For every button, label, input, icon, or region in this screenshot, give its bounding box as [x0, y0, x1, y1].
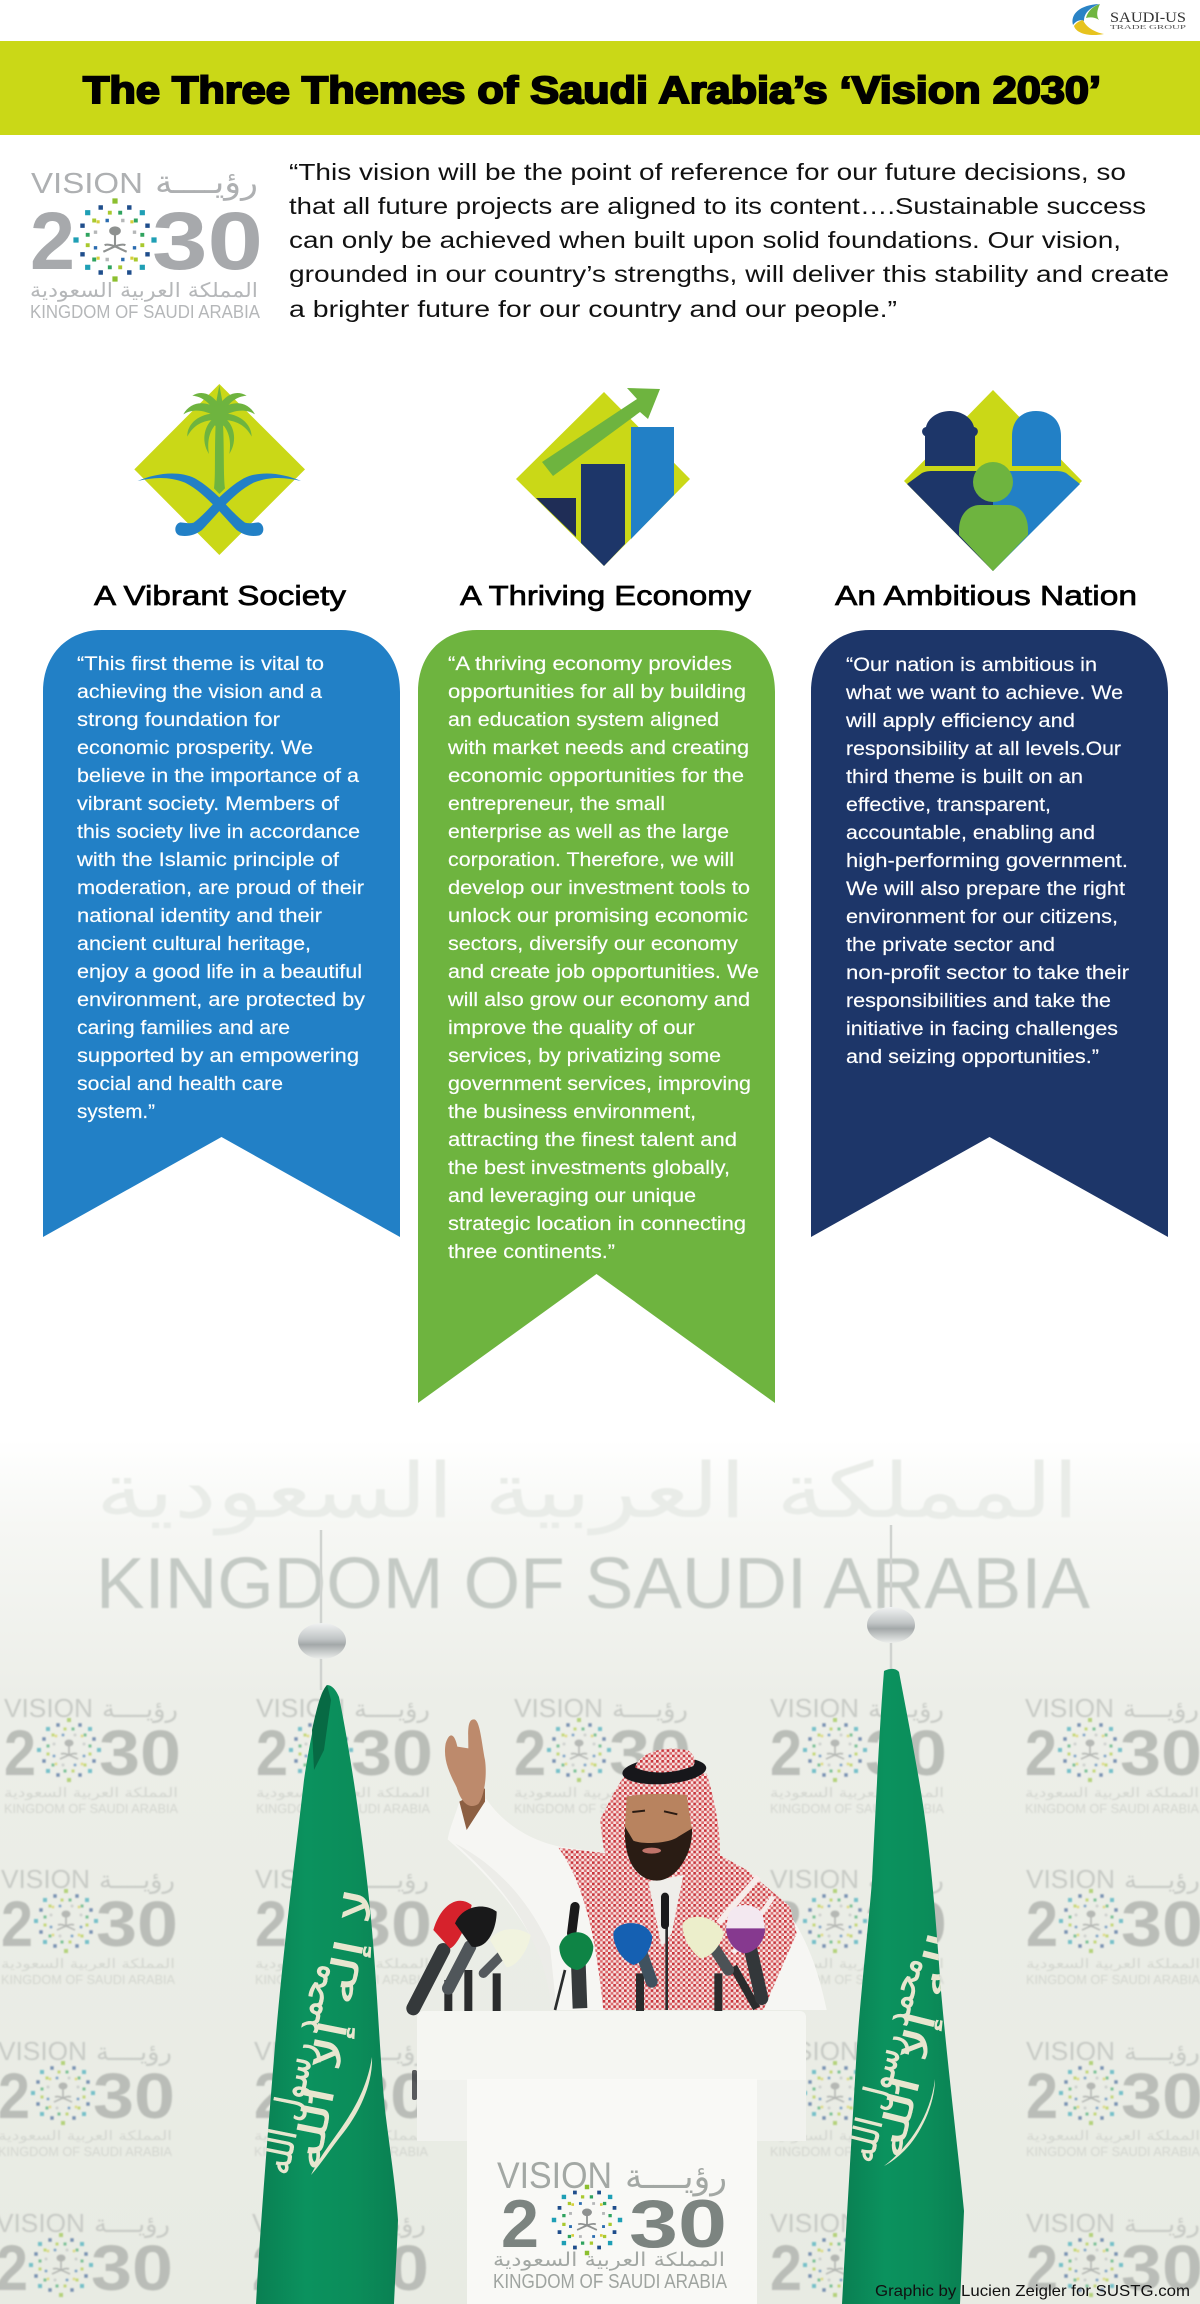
backdrop: repeated Vision 2030 logos: VISION [770, 1864, 859, 1894]
podium [412, 2011, 806, 2304]
backdrop: repeated Vision 2030 logos: المملكة العربية السعودية [4, 1786, 178, 1801]
backdrop: repeated Vision 2030 logos: KINGDOM OF SAUDI ARABIA [1025, 1801, 1199, 1816]
ribbon text: strategic location in connecting [448, 1214, 746, 1235]
backdrop: repeated Vision 2030 logos: 30 [349, 2060, 431, 2132]
backdrop: repeated Vision 2030 logos: رؤيــــة [99, 1866, 175, 1894]
ribbon text: economic prosperity. We [77, 738, 313, 759]
backdrop: repeated Vision 2030 logos: رؤيــــة [868, 1866, 944, 1894]
ribbon text: economic opportunities for the [448, 766, 744, 787]
ribbon text: government services, improving [448, 1074, 751, 1095]
heading: A Thriving Economy: A Thriving Economy [460, 580, 751, 611]
intro quote: a brighter future for our country and our people.” [289, 296, 897, 322]
ribbon text: will also grow our economy and [447, 990, 750, 1011]
backdrop: repeated Vision 2030 logos: 2 [770, 2232, 802, 2304]
backdrop: repeated Vision 2030 logos: رؤيــــة [102, 1695, 178, 1723]
podium Vision 2030 logo: VISION [497, 2155, 612, 2196]
backdrop: repeated Vision 2030 logos: 30 [347, 2232, 429, 2304]
backdrop: repeated Vision 2030 logos: رؤيــــة [1123, 1695, 1199, 1723]
podium Vision 2030 logo [493, 2155, 728, 2293]
backdrop: repeated Vision 2030 logos: 2 [1026, 1888, 1058, 1960]
backdrop: repeated Vision 2030 logos: VISION [1026, 1864, 1115, 1894]
backdrop: repeated Vision 2030 logos: KINGDOM OF SAUDI ARABIA [254, 2144, 428, 2159]
ribbon text: what we want to achieve. We [845, 683, 1123, 704]
backdrop: repeated Vision 2030 logos: 2 [4, 1717, 36, 1789]
ribbon text: national identity and their [77, 906, 323, 927]
backdrop: repeated Vision 2030 logos: 30 [1120, 1717, 1200, 1789]
backdrop: repeated Vision 2030 logos: 2 [514, 1717, 546, 1789]
backdrop: repeated Vision 2030 logos: 30 [1121, 2060, 1200, 2132]
backdrop: repeated Vision 2030 logos: المملكة العربية السعودية [0, 2129, 172, 2144]
backdrop: repeated Vision 2030 logos: KINGDOM OF SAUDI ARABIA [0, 2144, 172, 2159]
right flag with pole: محمد رسول الله [841, 1952, 932, 2166]
ribbon text: entrepreneur, the small [448, 794, 665, 815]
backdrop: repeated Vision 2030 logos: 30 [96, 1888, 178, 1960]
ribbon text: unlock our promising economic [448, 906, 748, 927]
podium Vision 2030 logo: المملكة العربية السعودية [493, 2249, 725, 2271]
ribbon text: responsibilities and take the [846, 991, 1111, 1012]
backdrop: repeated Vision 2030 logos: 2 [770, 2060, 802, 2132]
icon: bar chart with arrow [516, 388, 690, 566]
backdrop: repeated Vision 2030 logos: المملكة العربية السعودية [514, 1786, 688, 1801]
right flag with pole [841, 1525, 976, 2304]
Vision 2030 logo: VISION [31, 168, 143, 200]
heading: An Ambitious Nation: An Ambitious Nation [835, 580, 1137, 611]
backdrop: repeated Vision 2030 logos: المملكة العربية السعودية [256, 1786, 430, 1801]
backdrop: repeated Vision 2030 logos: KINGDOM OF SAUDI ARABIA [1026, 1972, 1200, 1987]
ribbon text: believe in the importance of a [77, 766, 359, 787]
backdrop: repeated Vision 2030 logos: 30 [865, 1717, 947, 1789]
ribbon text: three continents.” [448, 1242, 615, 1263]
ribbon text: third theme is built on an [846, 767, 1083, 788]
backdrop: repeated Vision 2030 logos: 30 [350, 1888, 432, 1960]
backdrop: repeated Vision 2030 logos: المملكة العربية السعودية [1026, 2129, 1200, 2144]
credit line: Graphic by Lucien Zeigler for SUSTG.com [875, 2283, 1190, 2300]
ribbon text: this society live in accordance [77, 822, 360, 843]
backdrop: repeated Vision 2030 logos: المملكة العربية السعودية [770, 1786, 944, 1801]
ribbon text: sectors, diversify our economy [448, 934, 739, 955]
ribbon text: “This first theme is vital to [77, 654, 324, 675]
backdrop: repeated Vision 2030 logos: 30 [865, 2232, 947, 2304]
Vision 2030 logo: رؤيــــة [155, 163, 258, 201]
ribbon text: achieving the vision and a [77, 682, 322, 703]
left flag with pole: محمد رسول الله [254, 1958, 340, 2178]
ribbon text: opportunities for all by building [448, 682, 746, 703]
backdrop: repeated Vision 2030 logos: 30 [609, 1717, 691, 1789]
ribbon text: the private sector and [846, 935, 1055, 956]
ribbon text: environment, are protected by [77, 990, 366, 1011]
backdrop: repeated Vision 2030 logos: VISION [770, 2036, 859, 2066]
backdrop: repeated Vision 2030 logos: VISION [255, 1864, 344, 1894]
ribbon text: services, by privatizing some [448, 1046, 721, 1067]
backdrop: repeated Vision 2030 logos: VISION [254, 2036, 343, 2066]
ribbon text: environment for our citizens, [846, 907, 1118, 928]
backdrop: repeated Vision 2030 logos: 2 [1026, 2060, 1058, 2132]
backdrop: repeated Vision 2030 logos: 2 [252, 2232, 284, 2304]
backdrop heading: Arabic and English wall text [96, 1446, 1090, 1624]
backdrop: repeated Vision 2030 logos: 30 [1121, 2232, 1200, 2304]
backdrop: repeated Vision 2030 logos: 30 [99, 1717, 181, 1789]
ribbon text: an education system aligned [448, 710, 719, 731]
podium Vision 2030 logo: KINGDOM OF SAUDI ARABIA [493, 2271, 728, 2293]
ribbon text: supported by an empowering [77, 1046, 359, 1067]
backdrop: repeated Vision 2030 logos: VISION [1026, 2208, 1115, 2238]
backdrop: repeated Vision 2030 logos: رؤيــــة [1124, 2038, 1200, 2066]
ribbon text: initiative in facing challenges [846, 1019, 1118, 1040]
ribbon text: accountable, enabling and [846, 823, 1095, 844]
left flag with pole [254, 1530, 398, 2304]
top-right logo: Saudi-US Trade Group: SAUDI-US [1110, 10, 1186, 26]
backdrop: repeated Vision 2030 logos: KINGDOM OF SAUDI ARABIA [770, 1801, 944, 1816]
backdrop heading: Arabic and English wall text: KINGDOM OF SAUDI ARABIA [96, 1544, 1090, 1624]
backdrop: repeated Vision 2030 logos: رؤيــــة [352, 2038, 428, 2066]
panel: A Vibrant Society ribbon [43, 630, 400, 1237]
backdrop: repeated Vision 2030 logos: VISION [252, 2208, 341, 2238]
backdrop: repeated Vision 2030 logos: KINGDOM OF SAUDI ARABIA [1026, 2144, 1200, 2159]
backdrop: repeated Vision 2030 logos: المملكة العربية السعودية [1025, 1786, 1199, 1801]
ribbon text [76, 654, 366, 1123]
Vision 2030 logo: 2 [30, 196, 75, 287]
ribbon text: caring families and are [77, 1018, 290, 1039]
ribbon text: effective, transparent, [846, 795, 1051, 816]
ribbon text: will apply efficiency and [845, 711, 1075, 732]
backdrop: repeated Vision 2030 logos: VISION [770, 1693, 859, 1723]
podium Vision 2030 logo: 2 [501, 2186, 539, 2262]
backdrop: repeated Vision 2030 logos: رؤيــــة [612, 1695, 688, 1723]
right flag with pole: لا إله إلا الله [869, 1881, 976, 2162]
backdrop: repeated Vision 2030 logos: 2 [1026, 2232, 1058, 2304]
ribbon text: non-profit sector to take their [846, 963, 1130, 984]
backdrop: repeated Vision 2030 logos: KINGDOM OF SAUDI ARABIA [255, 1972, 429, 1987]
backdrop: repeated Vision 2030 logos: 30 [865, 1888, 947, 1960]
intro quote: grounded in our country’s strengths, will deliver this stability and create [289, 261, 1169, 287]
ribbon text: social and health care [77, 1074, 283, 1095]
ribbon text: with the Islamic principle of [76, 850, 340, 871]
ribbon text: develop our investment tools to [448, 878, 750, 899]
ribbon text: “Our nation is ambitious in [846, 655, 1097, 676]
intro quote: can only be achieved when built upon solid foundations. Our vision, [289, 227, 1121, 253]
ribbon text: vibrant society. Members of [77, 794, 340, 815]
backdrop: repeated Vision 2030 logos: رؤيــــة [354, 1695, 430, 1723]
backdrop: repeated Vision 2030 logos: 30 [351, 1717, 433, 1789]
backdrop: repeated Vision 2030 logos: 2 [770, 1888, 802, 1960]
ribbon text: attracting the finest talent and [448, 1130, 737, 1151]
backdrop: repeated Vision 2030 logos: المملكة العربية السعودية [770, 2129, 944, 2144]
ribbon text [447, 654, 759, 1263]
heading: A Vibrant Society: A Vibrant Society [94, 580, 346, 611]
ribbon text: improve the quality of our [448, 1018, 696, 1039]
backdrop: repeated Vision 2030 logos: رؤيــــة [868, 2038, 944, 2066]
backdrop heading: Arabic and English wall text: المملكة العربية السعودية [96, 1446, 1079, 1536]
ribbon text: corporation. Therefore, we will [448, 850, 734, 871]
ribbon text [845, 655, 1130, 1068]
ribbon text: with market needs and creating [447, 738, 749, 759]
backdrop: repeated Vision 2030 logos: VISION [256, 1693, 345, 1723]
ribbon text: We will also prepare the right [846, 879, 1126, 900]
top-right logo: Saudi-US Trade Group [1072, 4, 1187, 35]
Vision 2030 logo: KINGDOM OF SAUDI ARABIA [30, 302, 260, 322]
backdrop: repeated Vision 2030 logos: KINGDOM OF SAUDI ARABIA [4, 1801, 178, 1816]
ribbon text: the business environment, [448, 1102, 696, 1123]
intro quote: that all future projects are aligned to its content….Sustainable success [289, 193, 1146, 219]
microphones [413, 1897, 765, 2012]
ribbon text: system.” [77, 1102, 155, 1123]
backdrop: repeated Vision 2030 logos: رؤيــــة [1124, 1866, 1200, 1894]
ribbon text: ancient cultural heritage, [77, 934, 311, 955]
backdrop: repeated Vision 2030 logos: VISION [1026, 2036, 1115, 2066]
backdrop: repeated Vision 2030 logos: 30 [91, 2232, 173, 2304]
podium Vision 2030 logo: 30 [629, 2186, 727, 2262]
podium Vision 2030 logo: رؤيــــة [625, 2157, 727, 2197]
ribbon text: and create job opportunities. We [448, 962, 759, 983]
backdrop: repeated Vision 2030 logos: 30 [93, 2060, 175, 2132]
backdrop: repeated Vision 2030 logos: KINGDOM OF SAUDI ARABIA [256, 1801, 430, 1816]
backdrop: repeated Vision 2030 logos: KINGDOM OF SAUDI ARABIA [770, 2144, 944, 2159]
backdrop: repeated Vision 2030 logos: KINGDOM OF SAUDI ARABIA [1, 1972, 175, 1987]
icon: palm and crossed swords [134, 384, 305, 555]
icon: people group [904, 390, 1082, 571]
backdrop: repeated Vision 2030 logos: رؤيــــة [353, 1866, 429, 1894]
ribbon text: and seizing opportunities.” [846, 1047, 1099, 1068]
backdrop: repeated Vision 2030 logos: 30 [865, 2060, 947, 2132]
top-right logo: Saudi-US Trade Group: TRADE GROUP [1110, 24, 1187, 31]
intro quote: “This vision will be the point of reference for our future decisions, so [289, 159, 1126, 185]
panel: A Thriving Economy ribbon [418, 630, 775, 1403]
ribbon text: responsibility at all levels.Our [846, 739, 1122, 760]
backdrop: repeated Vision 2030 logos: KINGDOM OF SAUDI ARABIA [514, 1801, 688, 1816]
ribbon text: high-performing government. [846, 851, 1128, 872]
speaker [445, 1719, 827, 2010]
backdrop: repeated Vision 2030 logos: 2 [254, 2060, 286, 2132]
backdrop: repeated Vision 2030 logos: رؤيــــة [868, 1695, 944, 1723]
backdrop: repeated Vision 2030 logos: VISION [770, 2208, 859, 2238]
backdrop: repeated Vision 2030 logos: VISION [4, 1693, 93, 1723]
backdrop: repeated Vision 2030 logos: 2 [770, 1717, 802, 1789]
title banner [0, 41, 1200, 135]
backdrop: repeated Vision 2030 logos: رؤيــــة [94, 2210, 170, 2238]
backdrop: repeated Vision 2030 logos: المملكة العربية السعودية [770, 1957, 944, 1972]
intro quote [289, 159, 1169, 322]
Vision 2030 logo [30, 163, 263, 322]
left flag with pole: لا إله إلا الله [284, 1886, 384, 2174]
backdrop: repeated Vision 2030 logos: KINGDOM OF SAUDI ARABIA [770, 1972, 944, 1987]
backdrop: repeated Vision 2030 logos: 30 [1121, 1888, 1200, 1960]
backdrop: repeated Vision 2030 logos: 2 [1, 1888, 33, 1960]
backdrop: repeated Vision 2030 logos: المملكة العربية السعودية [254, 2129, 428, 2144]
backdrop: repeated Vision 2030 logos: 2 [1025, 1717, 1057, 1789]
ribbon text: the best investments globally, [448, 1158, 730, 1179]
backdrop: repeated Vision 2030 logos: المملكة العربية السعودية [1, 1957, 175, 1972]
ribbon text: “A thriving economy provides [448, 654, 732, 675]
backdrop: repeated Vision 2030 logos: رؤيــــة [868, 2210, 944, 2238]
backdrop: repeated Vision 2030 logos: 2 [255, 1888, 287, 1960]
ribbon text: strong foundation for [77, 710, 281, 731]
ribbon text: enjoy a good life in a beautiful [77, 962, 362, 983]
panel: An Ambitious Nation ribbon [811, 630, 1168, 1237]
title: The Three Themes of Saudi Arabia’s ‘Vision 2030’ [83, 70, 1101, 112]
photo: press conference background [0, 1440, 1200, 2304]
backdrop: repeated Vision 2030 logos: المملكة العربية السعودية [1026, 1957, 1200, 1972]
ribbon text: moderation, are proud of their [77, 878, 365, 899]
backdrop: repeated Vision 2030 logos: VISION [514, 1693, 603, 1723]
backdrop: repeated Vision 2030 logos: VISION [1025, 1693, 1114, 1723]
backdrop: repeated Vision 2030 logos: VISION [0, 2036, 87, 2066]
backdrop: repeated Vision 2030 logos: 2 [256, 1717, 288, 1789]
ribbon text: enterprise as well as the large [448, 822, 729, 843]
backdrop: repeated Vision 2030 logos [0, 1693, 1200, 2304]
backdrop: repeated Vision 2030 logos: VISION [1, 1864, 90, 1894]
Vision 2030 logo: 30 [152, 196, 263, 287]
ribbon text: and leveraging our unique [448, 1186, 696, 1207]
backdrop: repeated Vision 2030 logos: رؤيــــة [350, 2210, 426, 2238]
backdrop: repeated Vision 2030 logos: رؤيــــة [1124, 2210, 1200, 2238]
backdrop: repeated Vision 2030 logos: رؤيــــة [96, 2038, 172, 2066]
backdrop: repeated Vision 2030 logos: المملكة العربية السعودية [255, 1957, 429, 1972]
Vision 2030 logo: المملكة العربية السعودية [30, 278, 258, 302]
